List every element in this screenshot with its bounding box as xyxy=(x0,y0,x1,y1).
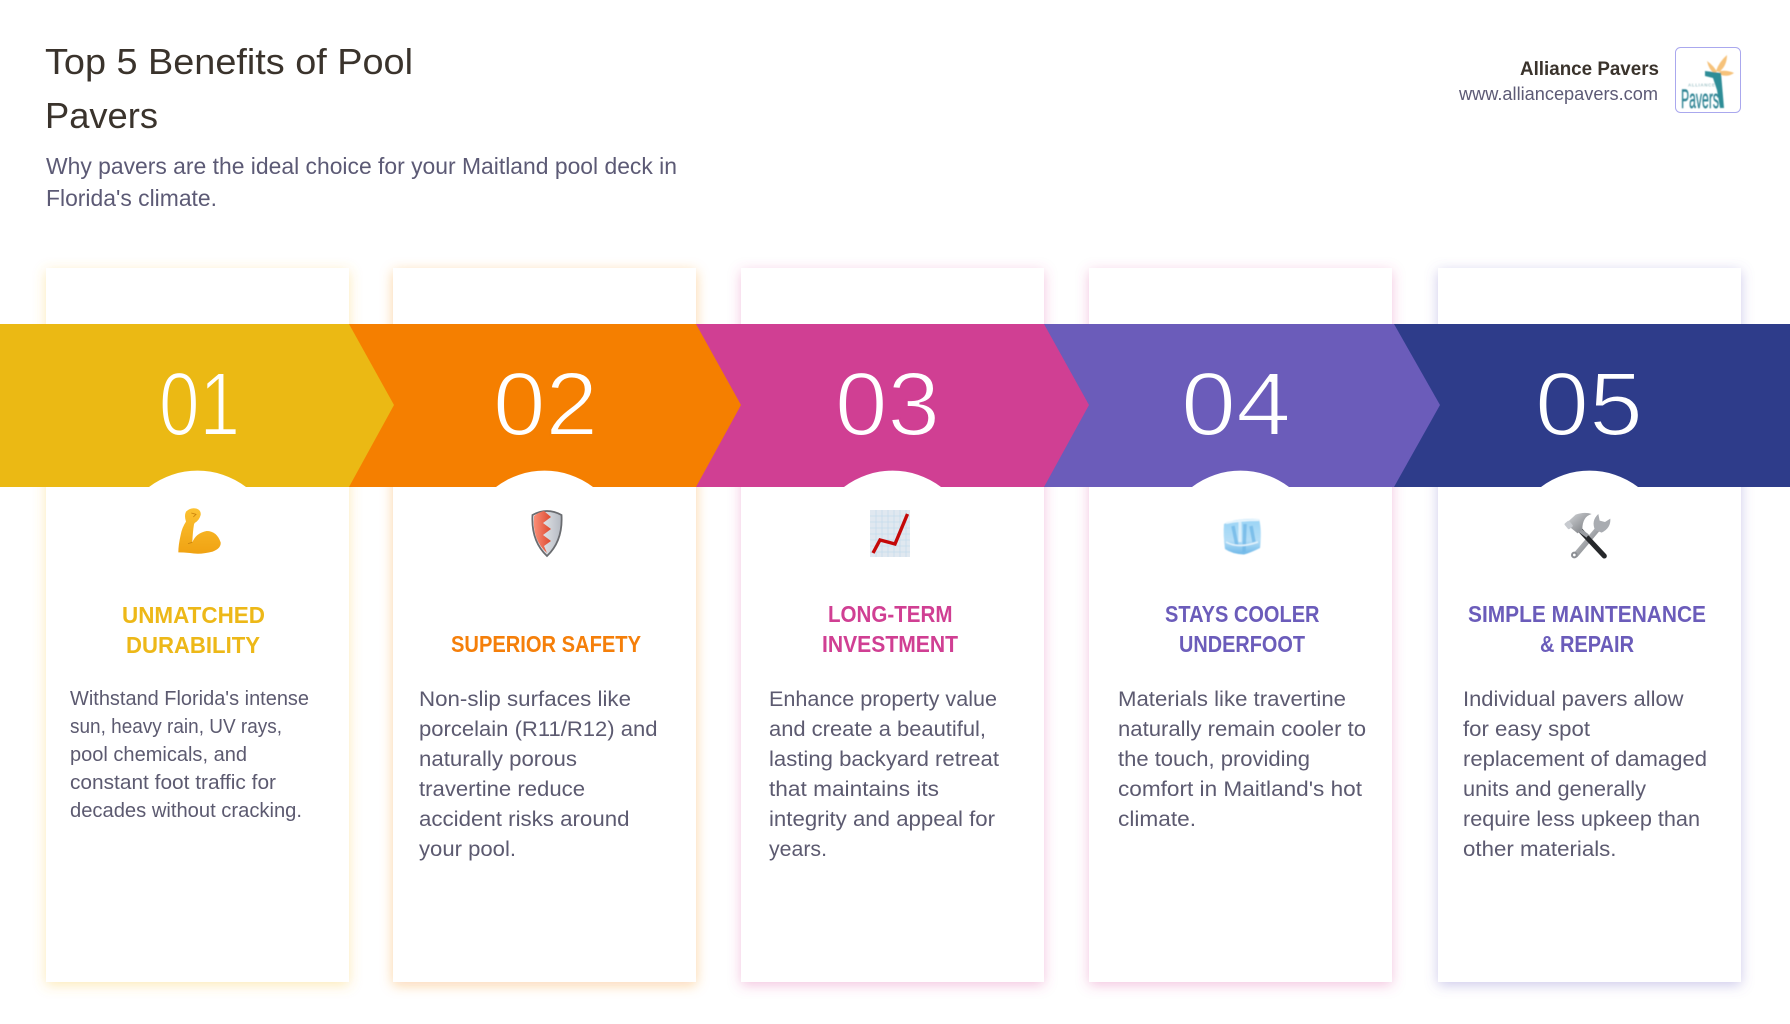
body text: that maintains its xyxy=(769,777,939,801)
panel: card 2 safety xyxy=(393,268,696,982)
heading xyxy=(1165,601,1320,657)
panel: card 5 maintenance xyxy=(1438,268,1741,982)
title xyxy=(45,41,413,136)
body text: porcelain (R11/R12) and xyxy=(419,717,658,741)
logo: Pavers xyxy=(1681,84,1719,114)
panel: card 4 cooler xyxy=(1089,268,1392,982)
body text: Withstand Florida's intense xyxy=(70,688,309,710)
heading: UNDERFOOT xyxy=(1179,631,1305,657)
body text: require less upkeep than xyxy=(1463,807,1700,831)
body text xyxy=(419,687,658,861)
body text: lasting backyard retreat xyxy=(769,747,999,771)
body text xyxy=(70,688,309,822)
heading: UNMATCHED xyxy=(122,602,265,628)
body text: naturally porous xyxy=(419,747,577,771)
panel: card 1 durability xyxy=(46,268,349,982)
icon: hammer and wrench xyxy=(1564,513,1610,557)
icon: ice cube xyxy=(1224,519,1261,554)
body text: Individual pavers allow xyxy=(1463,687,1684,711)
brand name and website xyxy=(1458,59,1659,104)
body text: naturally remain cooler to xyxy=(1118,717,1366,741)
body text: sun, heavy rain, UV rays, xyxy=(70,716,282,738)
body text: pool chemicals, and xyxy=(70,744,247,766)
chevron 02 xyxy=(300,324,741,487)
body text: climate. xyxy=(1118,807,1196,831)
heading: SIMPLE MAINTENANCE xyxy=(1468,601,1706,627)
body text: for easy spot xyxy=(1463,717,1590,741)
logo xyxy=(1676,48,1740,114)
body text: Materials like travertine xyxy=(1118,687,1346,711)
chevron banner xyxy=(0,324,1790,487)
body text: your pool. xyxy=(419,837,516,861)
heading: STAYS COOLER xyxy=(1165,601,1320,627)
chevron 05 xyxy=(1300,324,1790,487)
body text xyxy=(1463,687,1707,861)
chevron 01: 01 xyxy=(159,355,240,455)
brand name and website: Alliance Pavers xyxy=(1520,59,1659,80)
body text xyxy=(1118,687,1366,831)
subtitle: Why pavers are the ideal choice for your Maitland pool deck in xyxy=(46,153,677,179)
body text: other materials. xyxy=(1463,837,1616,861)
brand name and website: www.alliancepavers.com xyxy=(1458,83,1658,104)
panel: card 3 investment xyxy=(741,268,1044,982)
heading xyxy=(122,602,265,658)
title: Pavers xyxy=(45,95,158,136)
heading: SUPERIOR SAFETY xyxy=(451,631,641,657)
subtitle xyxy=(46,153,677,211)
title: Top 5 Benefits of Pool xyxy=(45,41,413,82)
body text: travertine reduce xyxy=(419,777,585,801)
chevron 01 xyxy=(0,324,394,487)
heading: & REPAIR xyxy=(1540,631,1634,657)
logo: ALLIANCE xyxy=(1688,82,1715,88)
icon: flexed biceps xyxy=(178,508,221,554)
heading: LONG-TERM xyxy=(828,601,952,627)
body text: decades without cracking. xyxy=(70,800,302,822)
body text: and create a beautiful, xyxy=(769,717,986,741)
heading: INVESTMENT xyxy=(822,631,958,657)
heading: DURABILITY xyxy=(126,632,260,658)
body text: integrity and appeal for xyxy=(769,807,995,831)
body text: the touch, providing xyxy=(1118,747,1310,771)
heading xyxy=(1468,601,1706,657)
chevron 04: 04 xyxy=(1181,355,1291,455)
icon: shield xyxy=(532,511,562,556)
chevron 03: 03 xyxy=(835,355,940,455)
chevron 05: 05 xyxy=(1535,355,1643,455)
body text: replacement of damaged xyxy=(1463,747,1707,771)
body text: Enhance property value xyxy=(769,687,997,711)
subtitle: Florida's climate. xyxy=(46,185,217,211)
body text: accident risks around xyxy=(419,807,630,831)
body text: comfort in Maitland's hot xyxy=(1118,777,1362,801)
chevron 03 xyxy=(650,324,1089,487)
chevron 02: 02 xyxy=(493,355,598,455)
body text xyxy=(769,687,999,861)
body text: constant foot traffic for xyxy=(70,772,276,794)
body text: Non-slip surfaces like xyxy=(419,687,631,711)
body text: units and generally xyxy=(1463,777,1646,801)
body text: years. xyxy=(769,837,827,861)
heading xyxy=(822,601,958,657)
chevron 04 xyxy=(1000,324,1440,487)
icon: rising chart xyxy=(870,510,910,557)
